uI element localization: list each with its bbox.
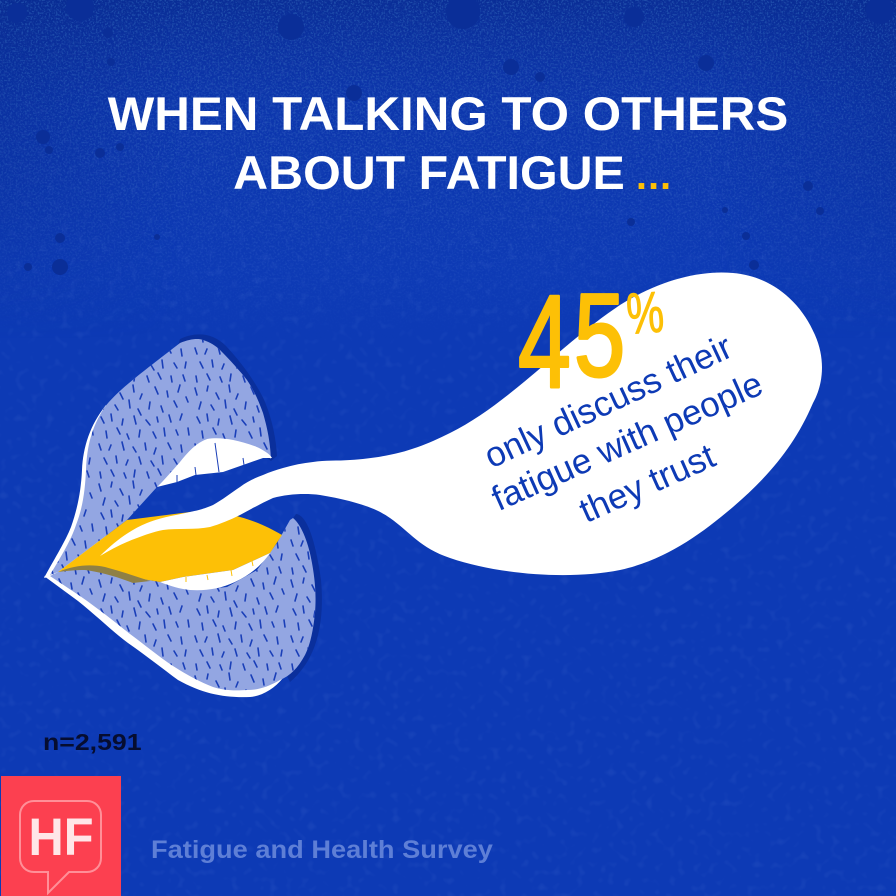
upper lip white edge [44,405,120,578]
survey name: Fatigue and Health Survey [151,835,493,864]
sample size: n=2,591 [43,730,142,756]
logo letters: HF [29,807,93,866]
lower lip hair texture [50,518,316,690]
title [108,88,788,200]
logo speech bubble [20,801,101,893]
lower lip shadow [270,514,322,682]
lower tooth gaps [186,561,253,582]
tongue shadow strip [58,565,150,583]
statistic description: fatigue with people [486,364,769,519]
speech bubble flowing from mouth [100,272,822,575]
illustration: open mouth [44,334,322,697]
percent sign: % [624,279,666,347]
lower lip [50,518,316,690]
title ellipsis: ... [636,154,672,198]
logo panel [1,776,121,896]
lower teeth [160,553,270,590]
statistic: 45% [518,269,666,416]
statistic: 45%: 4 [518,269,571,416]
upper teeth [157,438,272,487]
lower lip white edge [44,570,283,697]
upper lip [50,339,271,575]
upper lip shadow [170,334,277,461]
upper lip hair texture [50,339,271,575]
statistic: 45%: 5 [574,270,625,402]
tooth gaps [177,443,244,482]
statistic description: only discuss their [478,327,738,476]
tongue [58,511,282,582]
title: ABOUT FATIGUE [233,148,625,200]
statistic description: they trust [574,436,721,531]
title: WHEN TALKING TO OTHERS [108,88,788,141]
